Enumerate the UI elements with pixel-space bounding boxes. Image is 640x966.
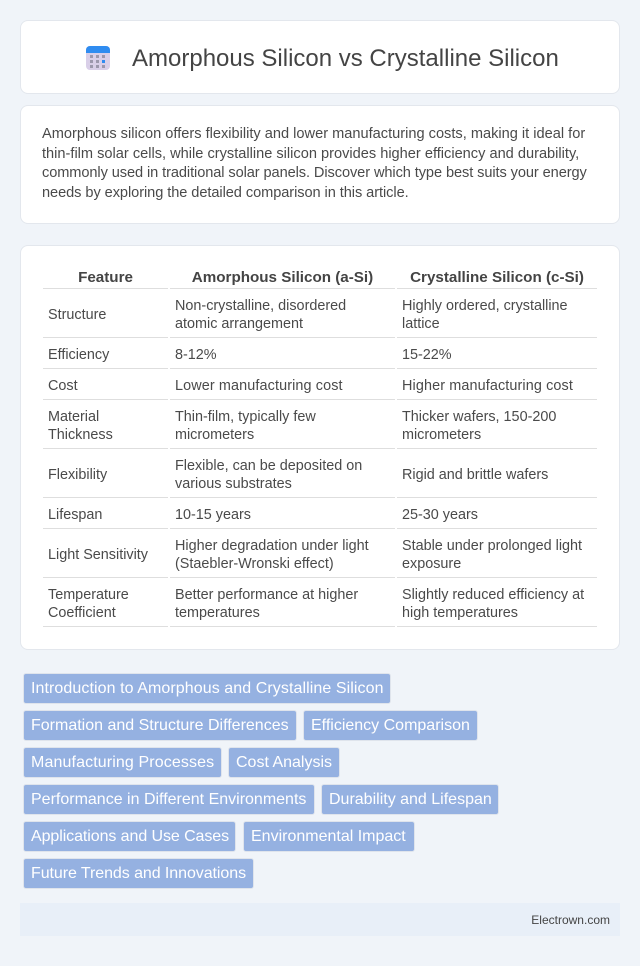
- thickness a-Si: micrometers: [175, 427, 254, 443]
- row: cost: Cost: [48, 378, 78, 394]
- icon: calendar grid: [86, 46, 110, 70]
- row: flexibility: Flexibility: [48, 467, 107, 483]
- thickness a-Si: Thin-film, typically few: [175, 409, 316, 425]
- temperature c-Si: [402, 587, 584, 621]
- row: temperature coefficient: Temperature: [48, 587, 129, 603]
- flexibility a-Si: Flexible, can be deposited on: [175, 458, 362, 474]
- tag: [23, 673, 391, 704]
- structure a-Si: atomic arrangement: [175, 316, 303, 332]
- flexibility c-Si: Rigid and brittle wafers: [402, 467, 548, 483]
- tag: [303, 710, 478, 741]
- structure a-Si: [175, 298, 346, 332]
- row: temperature coefficient: Coefficient: [48, 605, 116, 621]
- structure c-Si: Highly ordered, crystalline: [402, 298, 568, 314]
- topic tags: [23, 673, 499, 889]
- flexibility a-Si: [175, 458, 362, 492]
- row: light sensitivity: Light Sensitivity: [48, 547, 148, 563]
- temperature a-Si: Better performance at higher: [175, 587, 358, 603]
- row: temperature coefficient: [48, 587, 129, 621]
- header: crystalline silicon: Crystalline Silicon (c-Si): [410, 269, 584, 286]
- structure c-Si: lattice: [402, 316, 440, 332]
- row: material thickness: Material: [48, 409, 99, 425]
- row: structure: Structure: [48, 307, 106, 323]
- lifespan c-Si: 25-30 years: [402, 507, 478, 523]
- intro text: [42, 126, 587, 201]
- thickness c-Si: Thicker wafers, 150-200: [402, 409, 556, 425]
- header: amorphous silicon: Amorphous Silicon (a-Si): [192, 269, 373, 286]
- light c-Si: [402, 538, 582, 572]
- intro text: Amorphous silicon offers flexibility and lower manufacturing costs, making it ideal for: [42, 126, 585, 142]
- efficiency a-Si: 8-12%: [175, 347, 217, 363]
- flexibility a-Si: various substrates: [175, 476, 292, 492]
- tag: Applications and Use Cases: [31, 828, 229, 845]
- light a-Si: (Staebler-Wronski effect): [175, 556, 334, 572]
- tag: [23, 747, 222, 778]
- light c-Si: Stable under prolonged light: [402, 538, 582, 554]
- tag: Efficiency Comparison: [311, 717, 470, 734]
- lifespan a-Si: 10-15 years: [175, 507, 251, 523]
- tag: Cost Analysis: [236, 754, 332, 771]
- intro text: commonly used in traditional solar panels. Discover which type best suits your energy: [42, 165, 587, 181]
- footer bar: [20, 903, 620, 936]
- intro text: needs by exploring the detailed comparison in this article.: [42, 185, 409, 201]
- thickness c-Si: micrometers: [402, 427, 481, 443]
- cost a-Si: Lower manufacturing cost: [175, 378, 343, 394]
- row: material thickness: Thickness: [48, 427, 113, 443]
- comparison table: [43, 269, 597, 627]
- tag: Durability and Lifespan: [329, 791, 492, 808]
- tag: [243, 821, 415, 852]
- tag: [321, 784, 499, 815]
- structure c-Si: [402, 298, 568, 332]
- intro text: thin-film solar cells, while crystalline silicon provides higher efficiency and durability,: [42, 146, 579, 162]
- cost c-Si: Higher manufacturing cost: [402, 378, 573, 394]
- light c-Si: exposure: [402, 556, 461, 572]
- tag: Introduction to Amorphous and Crystalline Silicon: [31, 680, 384, 697]
- title: Amorphous Silicon vs Crystalline Silicon: [132, 45, 559, 72]
- tag: [23, 784, 315, 815]
- thickness a-Si: [175, 409, 316, 443]
- efficiency c-Si: 15-22%: [402, 347, 452, 363]
- light a-Si: [175, 538, 369, 572]
- header: feature: Feature: [78, 269, 133, 286]
- tag: Environmental Impact: [251, 828, 406, 845]
- temperature c-Si: high temperatures: [402, 605, 518, 621]
- tag: [23, 821, 236, 852]
- temperature a-Si: [175, 587, 358, 621]
- tag: Formation and Structure Differences: [31, 717, 289, 734]
- tag: [23, 858, 254, 889]
- temperature c-Si: Slightly reduced efficiency at: [402, 587, 584, 603]
- footer credit: Electrown.com: [531, 913, 610, 927]
- tag: Performance in Different Environments: [31, 791, 306, 808]
- temperature a-Si: temperatures: [175, 605, 260, 621]
- row: lifespan: Lifespan: [48, 507, 102, 523]
- light a-Si: Higher degradation under light: [175, 538, 369, 554]
- tag: Future Trends and Innovations: [31, 865, 246, 882]
- tag: [228, 747, 340, 778]
- tag: [23, 710, 297, 741]
- structure a-Si: Non-crystalline, disordered: [175, 298, 346, 314]
- intro card: [20, 105, 620, 224]
- row: efficiency: Efficiency: [48, 347, 109, 363]
- row: material thickness: [48, 409, 113, 443]
- thickness c-Si: [402, 409, 556, 443]
- comparison table card: [20, 245, 620, 650]
- header card: [20, 20, 620, 94]
- tag: Manufacturing Processes: [31, 754, 214, 771]
